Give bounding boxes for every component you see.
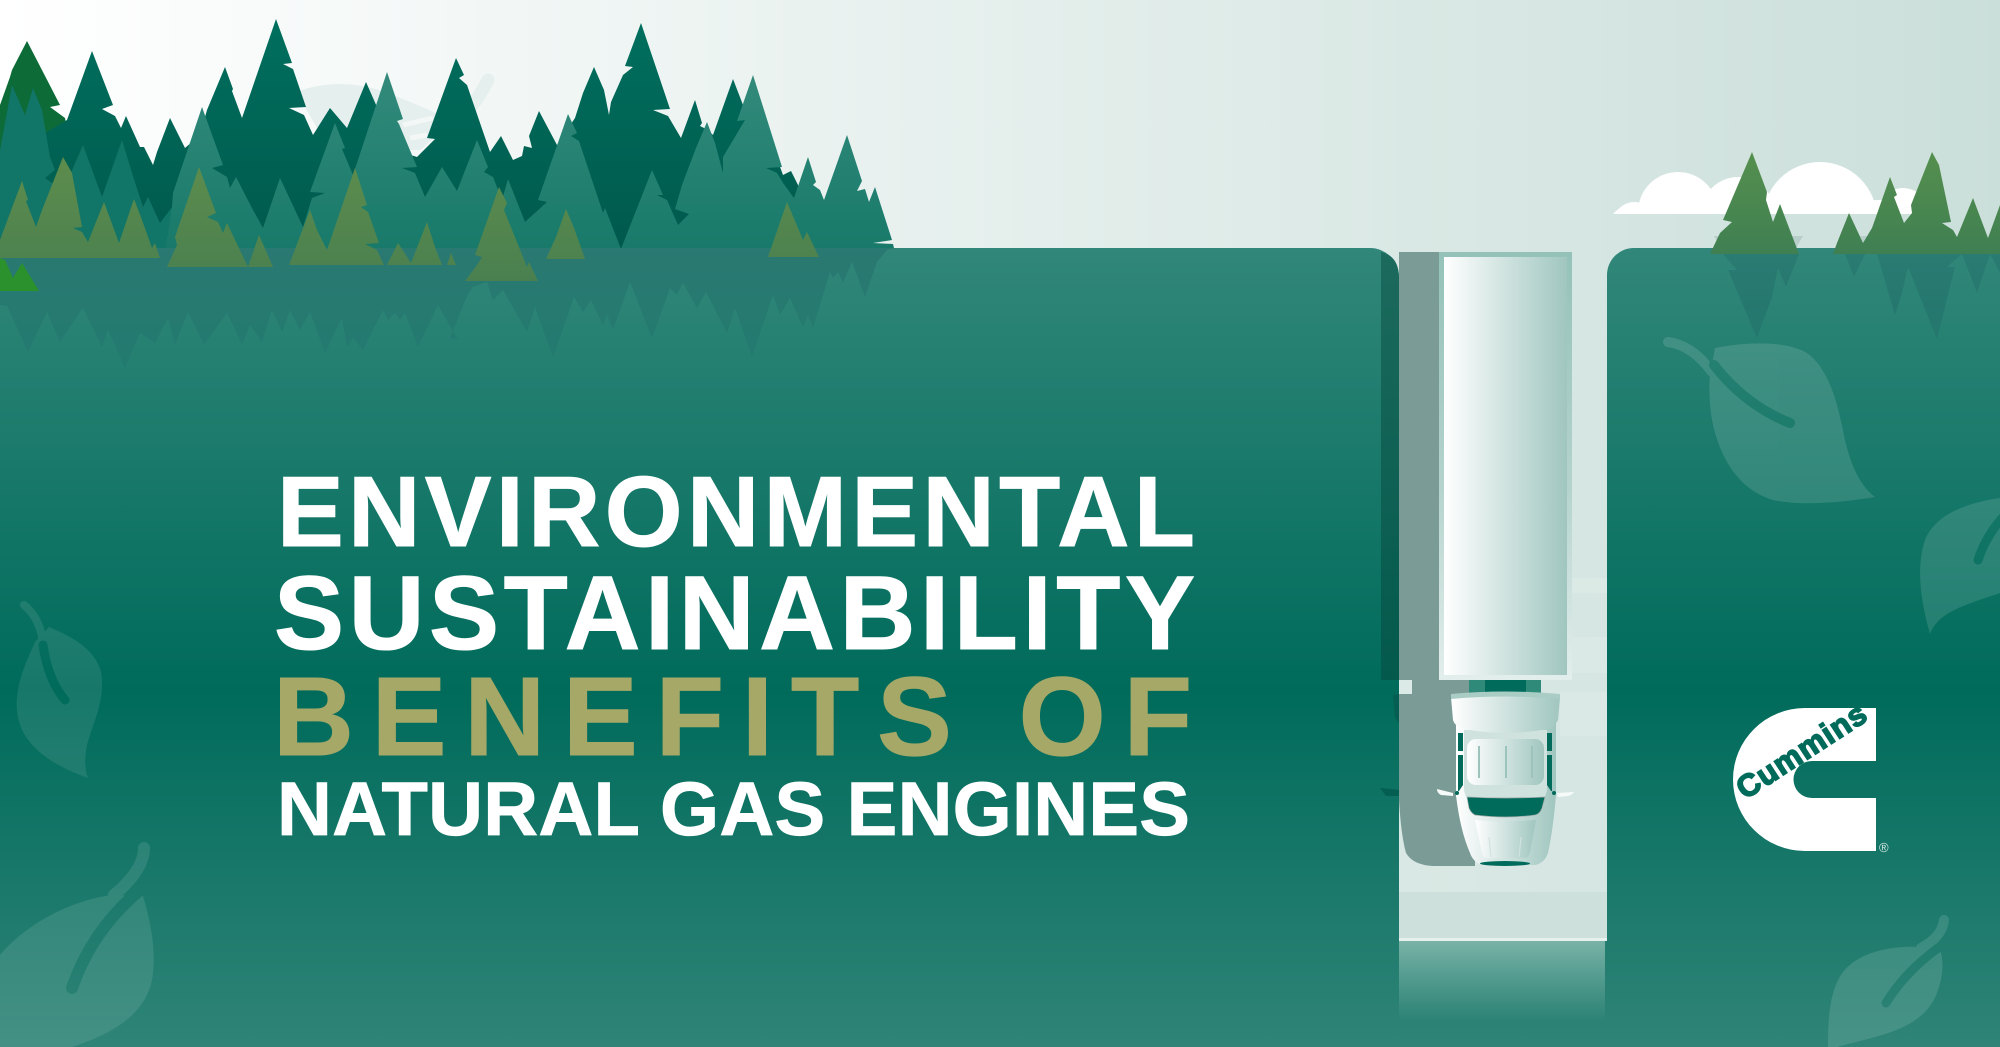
- title line 1: ENVIRONMENTAL: [277, 456, 1195, 568]
- right tree reflection above waterline: [1714, 236, 1870, 250]
- title line 2: SUSTAINABILITY: [274, 555, 1195, 672]
- roof lines: [1479, 746, 1532, 778]
- mirror shadows on panel: [1380, 694, 1399, 796]
- logo C shape: [1733, 708, 1876, 851]
- mirror mounts: [1455, 791, 1556, 795]
- right pine tree group: [1833, 152, 2000, 254]
- right tree reflection in panel: [1723, 254, 1799, 338]
- cab body upper: [1456, 722, 1556, 797]
- forest: far green tree: [0, 41, 68, 180]
- cab roof cap: [1451, 694, 1560, 733]
- road light bands: [1560, 578, 1607, 736]
- leaf: upper right: [1668, 342, 1875, 503]
- roof panel: [1467, 739, 1544, 785]
- bumper: [1480, 861, 1530, 866]
- side windows: [1458, 733, 1552, 791]
- bright green small tree: [0, 258, 39, 291]
- hood: [1475, 820, 1536, 858]
- registered mark: ®: [1879, 840, 1889, 855]
- truck connector: [1469, 680, 1541, 694]
- title line 3: BENEFITS OF: [273, 654, 1192, 779]
- road edge highlight: [1399, 938, 1607, 941]
- leaf: left middle: [17, 605, 102, 778]
- right tree group reflection in panel: [1845, 254, 2000, 339]
- road reflection base: [1399, 940, 1607, 1047]
- title line 4: NATURAL GAS ENGINES: [277, 767, 1190, 852]
- road reflection light: [1399, 941, 1605, 1021]
- forest reflection in panel: [0, 248, 896, 368]
- forest: dark tree layer: [0, 19, 810, 250]
- truck cab: [1437, 692, 1574, 866]
- faint background leaf in sky: [296, 80, 488, 150]
- logo wordmark: Cummins: [1730, 696, 1873, 806]
- cab body lower: [1456, 795, 1556, 865]
- mirrors: [1437, 789, 1574, 797]
- right pine tree: [1710, 152, 1799, 254]
- leaf: bottom right: [1828, 920, 1944, 1047]
- left main panel: [0, 248, 1399, 1047]
- forest: left teal trees: [0, 85, 172, 252]
- shadow small block: [1399, 680, 1412, 694]
- windshield: [1467, 797, 1545, 817]
- panel shadow stripe: [1381, 252, 1399, 680]
- truck trailer: [1439, 252, 1572, 680]
- hood creases: [1489, 837, 1521, 857]
- leaf: right edge: [1920, 498, 2000, 634]
- cab roof lip: [1451, 692, 1560, 699]
- olive trees left group: [0, 157, 819, 281]
- Cummins logo: [1730, 696, 1889, 855]
- forest: mid teal tree layer: [160, 72, 895, 252]
- truck shadow: [1399, 252, 1475, 866]
- clouds: [1613, 162, 1916, 214]
- leaf: left bottom: [0, 848, 154, 1047]
- right main panel: [1607, 248, 2000, 1047]
- road gap base band: [1399, 892, 1607, 939]
- title block: [273, 456, 1195, 852]
- cab inner tint: [1464, 730, 1547, 797]
